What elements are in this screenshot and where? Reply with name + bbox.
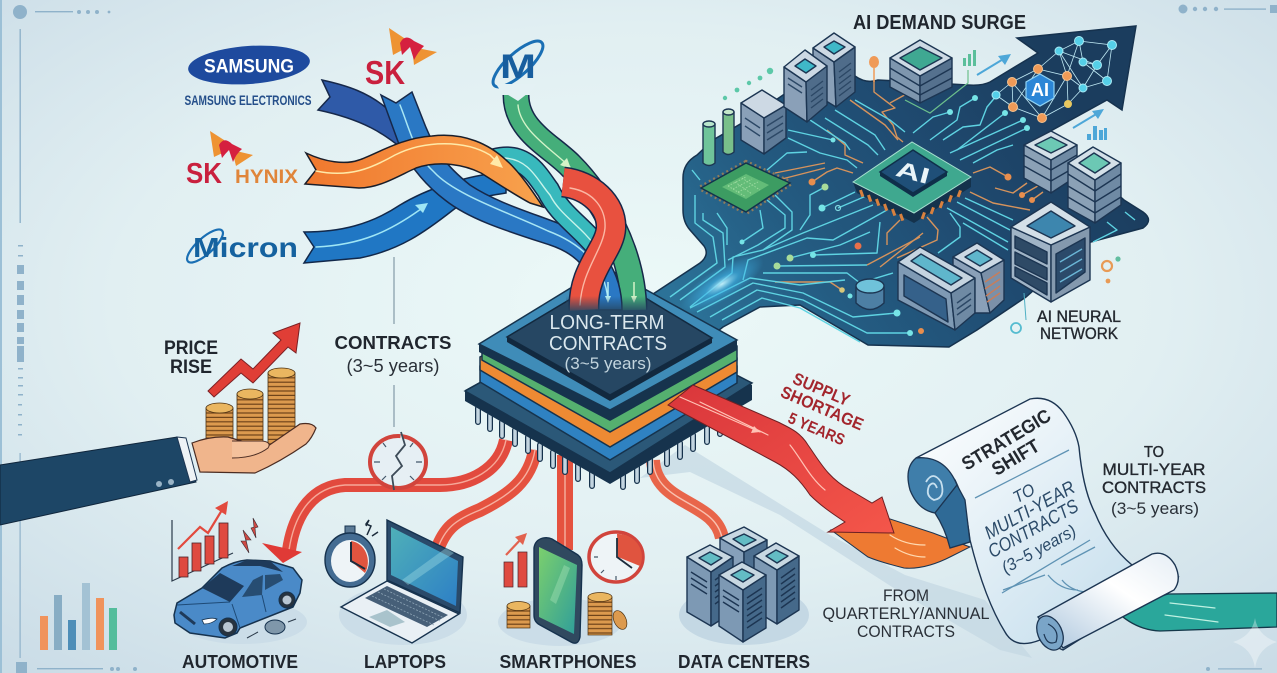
icon: server I: [953, 243, 1004, 313]
icon: green chip: [701, 163, 790, 212]
icon: server H: [898, 247, 975, 330]
connector lines to contracts label: [393, 257, 395, 427]
scroll body text: TO: [1010, 480, 1038, 507]
logo: Micron: [183, 225, 298, 267]
icon: car: [174, 560, 307, 644]
top plate: [479, 267, 737, 421]
logo: Samsung: SAMSUNG: [204, 56, 294, 78]
arrow: supply shortage red arrow: [668, 385, 894, 533]
gear: [265, 620, 285, 634]
label: supply shortage: SHORTAGE: [778, 382, 866, 434]
label: from quarterly/annual contracts: [822, 587, 990, 641]
label: supply shortage: SUPPLY: [790, 369, 853, 410]
label: supply shortage: 5 YEARS: [785, 410, 847, 449]
label: AI neural network: NETWORK: [1040, 325, 1118, 343]
chip label: [549, 312, 667, 373]
category labels: [182, 651, 810, 672]
category labels: SMARTPHONES: [500, 651, 636, 672]
label: from quarterly/annual contracts: FROM: [883, 587, 929, 605]
logo: SK Hynix: HYNIX: [235, 167, 298, 188]
ribbon: Micron blue: [304, 172, 506, 263]
ribbon: to smartphone: [557, 455, 573, 550]
label: contracts: CONTRACTS: [334, 332, 452, 353]
ribbon: teal bottom right: [1115, 593, 1277, 631]
blue layer: [480, 300, 737, 460]
soft shadow under chip and scroll: [640, 445, 1032, 658]
label: price rise: [164, 338, 218, 378]
label: from quarterly/annual contracts: CONTRACTS: [857, 623, 955, 641]
label: price rise: RISE: [170, 357, 212, 378]
label: to multi-year contracts: [1102, 444, 1206, 518]
icon: server stack D: [890, 40, 952, 103]
category labels: DATA CENTERS: [678, 651, 810, 672]
logo: SK Hynix: [186, 131, 298, 190]
logo: SK Hynix: SK: [186, 158, 222, 190]
scroll bottom roll: [1032, 553, 1178, 654]
ribbon: green: [496, 84, 634, 310]
icon: cylinders: [703, 109, 734, 166]
icon: price rise arrow: [208, 323, 300, 397]
label: to multi-year contracts: TO: [1144, 444, 1164, 461]
ribbon: SK blue: [381, 92, 622, 310]
circuit traces: [670, 70, 1135, 342]
icon: automotive chart: [172, 501, 258, 581]
icon: data center servers: [679, 527, 809, 645]
scroll: strategic shift: [908, 398, 1178, 654]
scroll top curl: [908, 458, 970, 548]
logo: Samsung: [184, 42, 312, 108]
logo: SK top: SK: [365, 54, 405, 91]
scroll body text: CONTRACTS: [985, 496, 1083, 563]
inner dark plate: [507, 337, 712, 401]
base plate: [465, 310, 752, 484]
icon: broken clock: [370, 432, 426, 490]
energy glow: [673, 245, 771, 323]
scroll sheet: [916, 398, 1178, 650]
scroll heading: STRATEGIC: [958, 406, 1055, 475]
scroll body text: [968, 462, 1097, 579]
label: from quarterly/annual contracts: QUARTERLY/ANNUAL: [822, 605, 990, 623]
ribbon: to laptop: [437, 450, 535, 550]
logo: SK top: [365, 28, 437, 91]
icon: AI chip: [853, 142, 971, 223]
icon: smartphone: [534, 538, 582, 643]
ribbon: orange under scroll: [831, 517, 970, 568]
scroll body text: MULTI-YEAR: [981, 477, 1079, 544]
icon: stopwatch: [325, 520, 378, 587]
icon: small cylinder: [856, 279, 884, 310]
ribbon: red: [563, 182, 611, 310]
ribbon: to automotive: [289, 440, 506, 550]
scroll heading: SHIFT: [988, 436, 1044, 480]
ribbon: Samsung dark blue: [318, 80, 412, 147]
icon: hand holding coins: [0, 368, 316, 525]
category labels: AUTOMOTIVE: [182, 651, 298, 672]
red lines from chip: [289, 440, 722, 550]
chip label: (3~5 years): [564, 355, 652, 373]
label: contracts: [334, 332, 452, 376]
label: to multi-year contracts: (3~5 years): [1111, 499, 1199, 518]
arrows on ribbons: [605, 282, 637, 303]
logo: Micron: Micron: [193, 232, 298, 263]
label: contracts: (3~5 years): [346, 356, 440, 376]
icon: phone shadow: [498, 598, 622, 646]
label: supply shortage: [770, 367, 873, 454]
logo: Micron top mark: [487, 34, 549, 94]
logo: Samsung: SAMSUNG ELECTRONICS: [184, 92, 312, 108]
icon: server G: [1011, 202, 1090, 302]
icon: sparkle watermark: [1233, 618, 1277, 668]
ribbon: orange SK Hynix: [305, 135, 543, 207]
icon: clock right of phone: [589, 532, 643, 582]
panel: AI circuit board arrow: [650, 26, 1148, 347]
AI badge: AI: [1031, 80, 1049, 100]
icon: server C: [741, 90, 786, 154]
icon: AI network rings: [1011, 256, 1121, 333]
icon: stack F: [1068, 147, 1121, 223]
decoration: top-right dots and rule: [1178, 4, 1277, 671]
ribbon: to data centers: [653, 460, 722, 538]
coin stacks: [206, 368, 295, 447]
hand: [192, 424, 316, 473]
icon: server B: [813, 33, 855, 107]
chip label: CONTRACTS: [549, 333, 667, 355]
icon: coins near phone: [507, 592, 630, 635]
icon: server A: [784, 50, 827, 122]
icon: laptop: [339, 520, 467, 645]
main chip: long-term contracts: [465, 267, 752, 487]
icon: AI chip: AI: [893, 156, 933, 189]
arrow head: automotive ribbon: [262, 543, 302, 563]
label: to multi-year contracts: MULTI-YEAR: [1102, 460, 1206, 479]
label: AI neural network: [1037, 308, 1121, 343]
icon: growth arrows and mini bars on board: [723, 50, 1107, 140]
heading: AI demand surge: AI DEMAND SURGE: [853, 11, 1026, 34]
logo: Micron top mark: M: [500, 48, 536, 86]
green layer: [482, 290, 737, 432]
ribbon: teal: [495, 158, 600, 250]
ribbon fade into chip: [566, 296, 650, 313]
label: to multi-year contracts: CONTRACTS: [1102, 478, 1206, 497]
scroll dividers: [975, 450, 1095, 593]
category labels: LAPTOPS: [364, 651, 446, 672]
icon: phone chart: [504, 533, 527, 587]
trace end nodes: [740, 92, 1030, 336]
label: AI neural network: AI NEURAL: [1037, 308, 1121, 326]
left chip area traces: [670, 195, 717, 297]
icon: neural network in arrow: [992, 36, 1116, 122]
arm sleeve: [0, 437, 196, 525]
label: price rise: PRICE: [164, 338, 218, 359]
icon: stack E: [1024, 131, 1077, 193]
scroll body text: (3~5 years): [998, 521, 1079, 577]
orange layer: [480, 295, 737, 447]
bar chart: bottom left: [40, 583, 117, 650]
decoration: top-left dots and rule: [13, 5, 137, 673]
pins: [478, 408, 720, 487]
chip label: LONG-TERM: [550, 312, 664, 334]
